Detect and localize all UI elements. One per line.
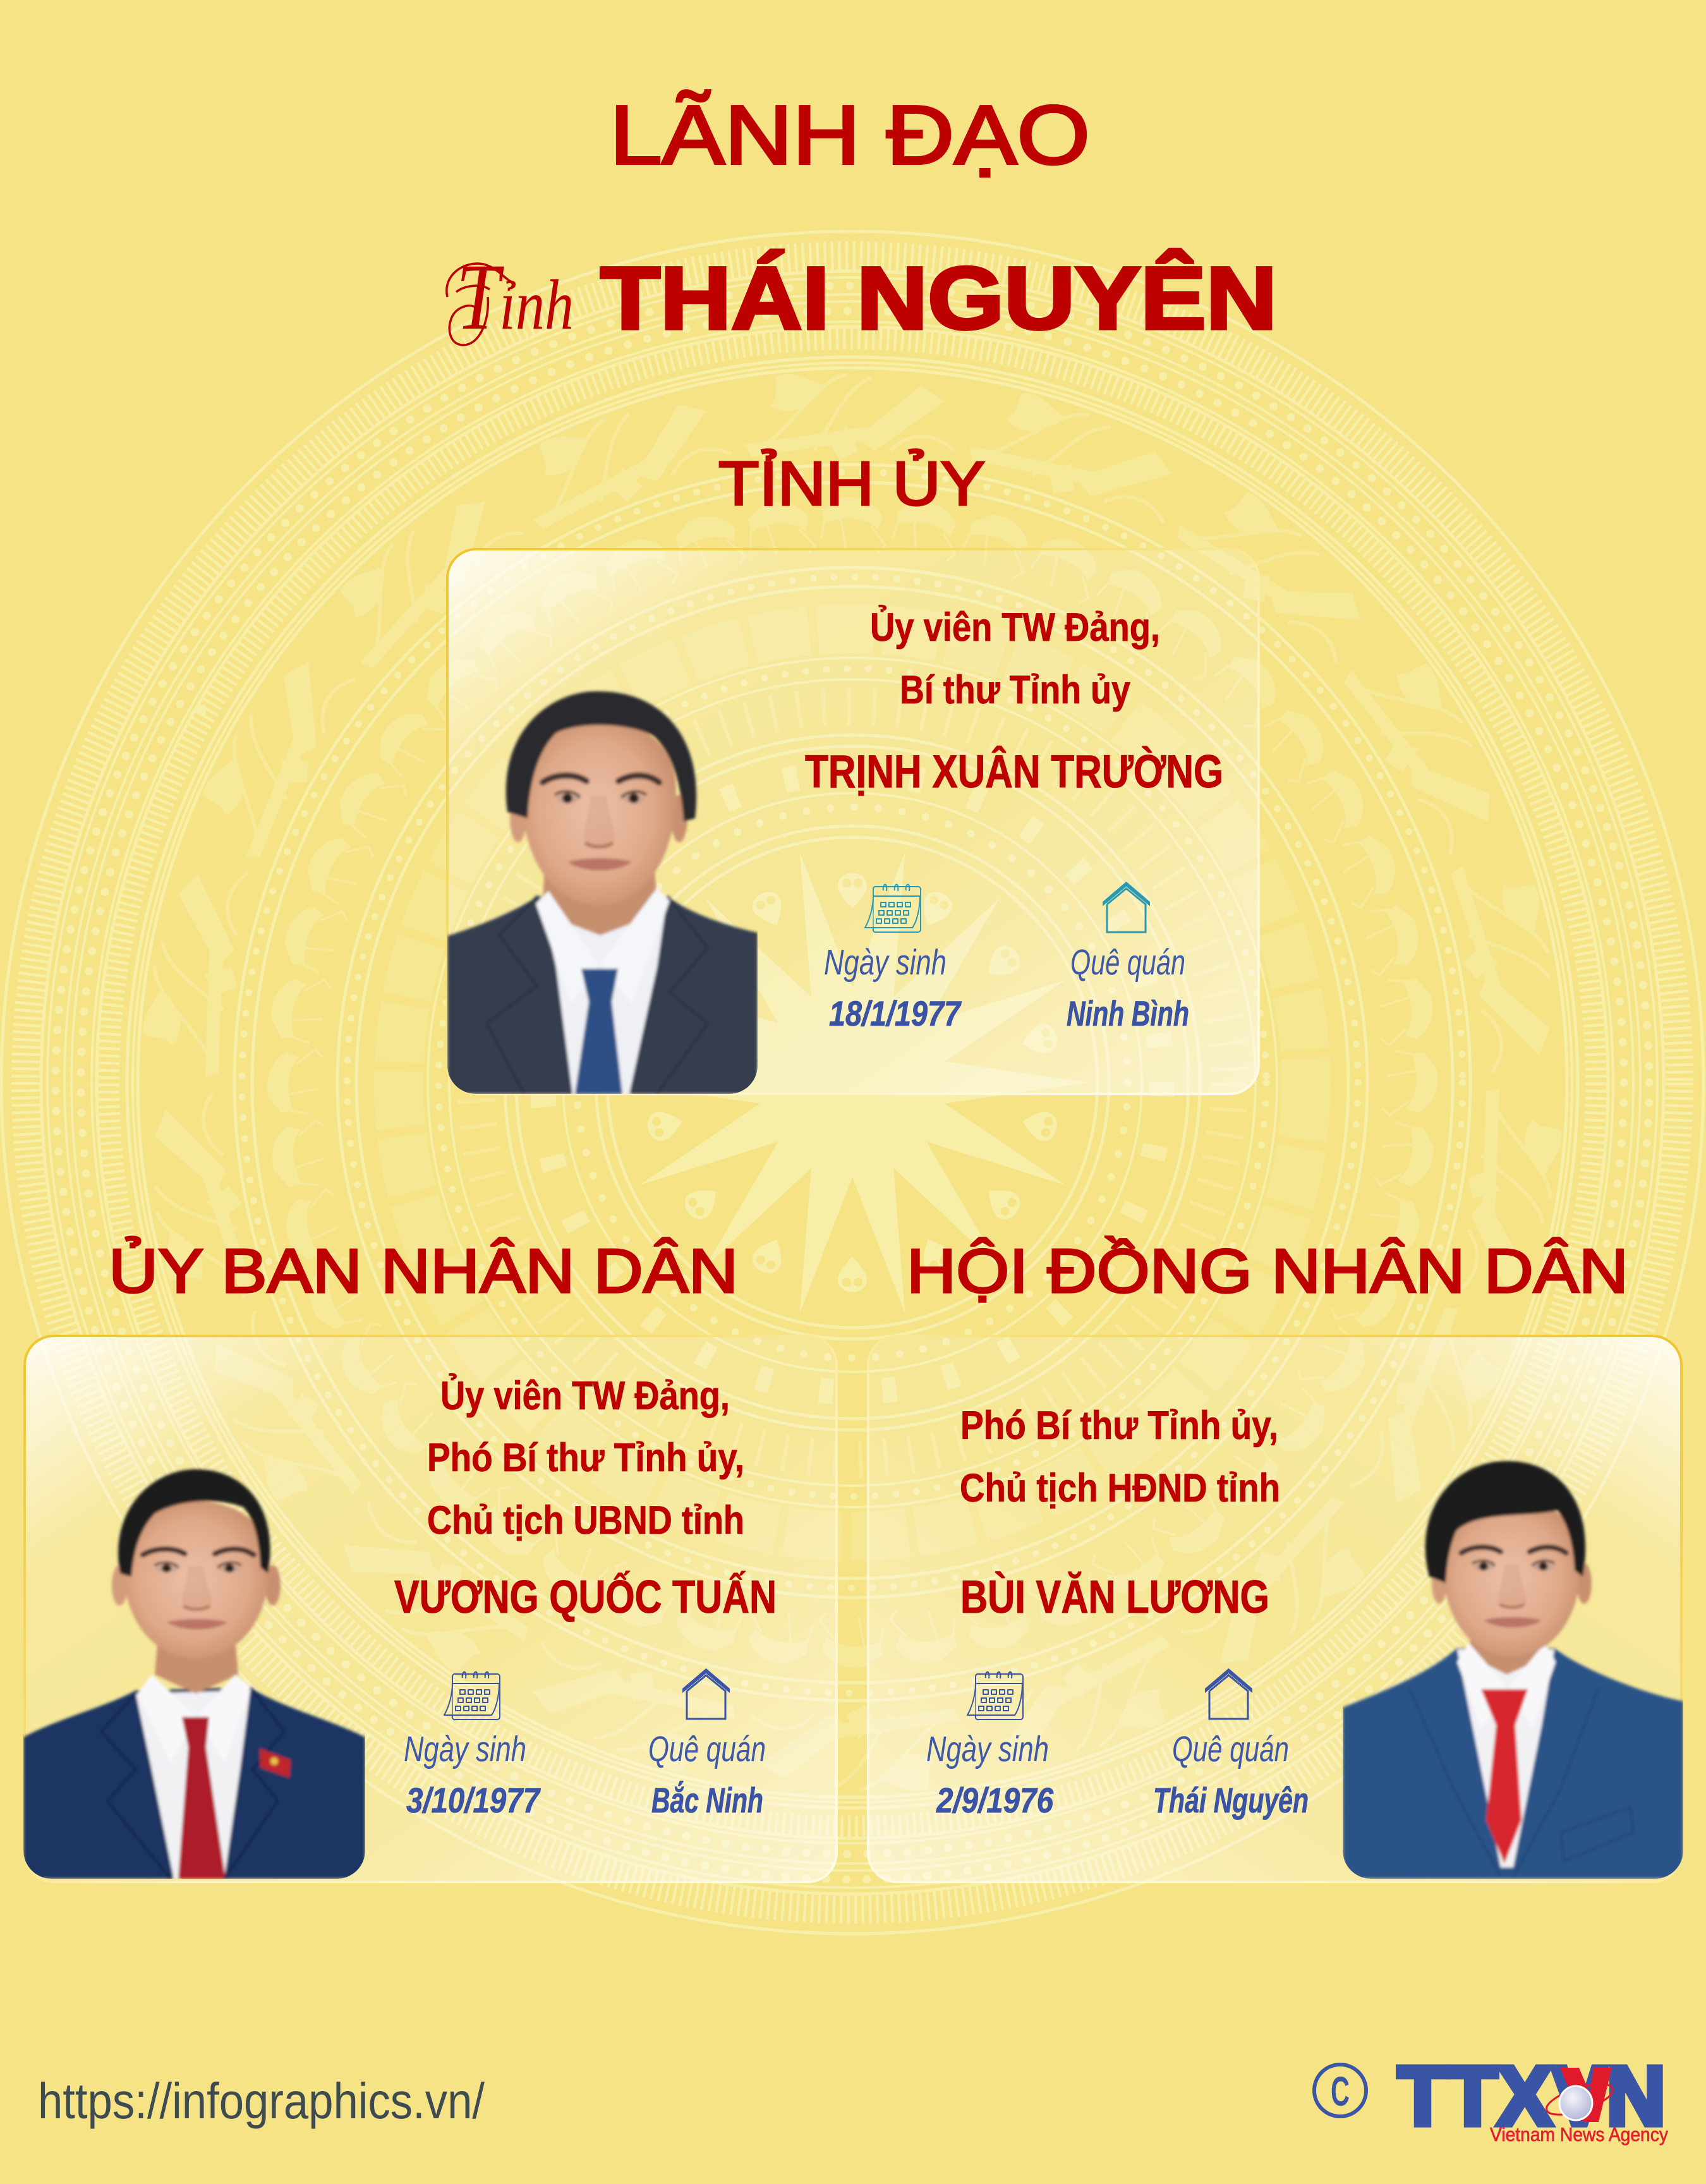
role text line 1: Phó Bí thư Tỉnh ủy, bbox=[960, 1404, 1278, 1448]
value: birth date: 3/10/1977 bbox=[406, 1780, 541, 1820]
role text line 1: Ủy viên TW Đảng, bbox=[440, 1373, 730, 1418]
title script word: Tỉnh: Tỉnh bbox=[456, 245, 574, 349]
name: VƯƠNG QUỐC TUẤN bbox=[394, 1571, 777, 1623]
icon: house bbox=[682, 1668, 730, 1719]
label: hometown: Quê quán bbox=[1070, 942, 1185, 983]
logo red V and globe bbox=[1543, 2068, 1616, 2122]
logo: TTXVN with copyright mark bbox=[1314, 2049, 1668, 2145]
icon: calendar bbox=[444, 1672, 500, 1720]
panel: Bùi Văn Lương bbox=[868, 1336, 1683, 1882]
label: birth date: Ngày sinh bbox=[824, 942, 947, 983]
label: hometown: Quê quán bbox=[1172, 1729, 1289, 1769]
heading: Hội đồng nhân dân: HỘI ĐỒNG NHÂN DÂN bbox=[907, 1236, 1628, 1306]
title line: THÁI NGUYÊN: THÁI NGUYÊN bbox=[600, 248, 1277, 348]
label: hometown: Quê quán bbox=[648, 1729, 766, 1769]
value: hometown: Ninh Bình bbox=[1067, 993, 1189, 1033]
card background bbox=[25, 1336, 837, 1882]
heading: Tỉnh ủy: TỈNH ỦY bbox=[718, 449, 985, 518]
heading: Ủy ban nhân dân: ỦY BAN NHÂN DÂN bbox=[109, 1236, 738, 1306]
panel: Vương Quốc Tuấn bbox=[23, 1336, 837, 1882]
logo wordmark: TTXVN bbox=[1398, 2049, 1666, 2142]
name: TRỊNH XUÂN TRƯỜNG bbox=[805, 746, 1223, 798]
title line: LÃNH ĐẠO: LÃNH ĐẠO bbox=[610, 88, 1090, 181]
icon: calendar bbox=[967, 1672, 1023, 1720]
role text line 2: Phó Bí thư Tỉnh ủy, bbox=[427, 1436, 744, 1480]
portrait: Bùi Văn Lương bbox=[1343, 1461, 1683, 1879]
logo tagline: Vietnam News Agency bbox=[1490, 2123, 1668, 2145]
label: birth date: Ngày sinh bbox=[404, 1729, 526, 1769]
portrait: Trịnh Xuân Trường bbox=[447, 691, 758, 1094]
value: hometown: Thái Nguyên bbox=[1153, 1780, 1309, 1820]
value: birth date: 18/1/1977 bbox=[829, 993, 962, 1033]
icon: house bbox=[1103, 882, 1150, 932]
title bbox=[447, 88, 1277, 349]
card background bbox=[447, 549, 1259, 1094]
panel: Trịnh Xuân Trường bbox=[447, 549, 1259, 1094]
icon: copyright circle: C bbox=[1331, 2068, 1350, 2114]
value: hometown: Bắc Ninh bbox=[651, 1780, 763, 1820]
card background bbox=[868, 1336, 1681, 1882]
footer url: https://infographics.vn/ bbox=[38, 2073, 485, 2129]
name: BÙI VĂN LƯƠNG bbox=[960, 1572, 1269, 1623]
role text line 2: Chủ tịch HĐND tỉnh bbox=[960, 1466, 1280, 1510]
value: birth date: 2/9/1976 bbox=[936, 1780, 1054, 1820]
decorative bronze drum watermark bbox=[0, 231, 1706, 1934]
role text line 3: Chủ tịch UBND tỉnh bbox=[427, 1498, 744, 1543]
icon: copyright circle bbox=[1314, 2065, 1366, 2116]
icon: calendar bbox=[865, 885, 921, 932]
role text line 2: Bí thư Tỉnh ủy bbox=[900, 668, 1130, 712]
portrait: Vương Quốc Tuấn bbox=[23, 1469, 365, 1879]
role text: Ủy viên TW Đảng, bbox=[870, 605, 1160, 650]
label: birth date: Ngày sinh bbox=[926, 1729, 1049, 1769]
icon: house bbox=[1205, 1668, 1252, 1719]
